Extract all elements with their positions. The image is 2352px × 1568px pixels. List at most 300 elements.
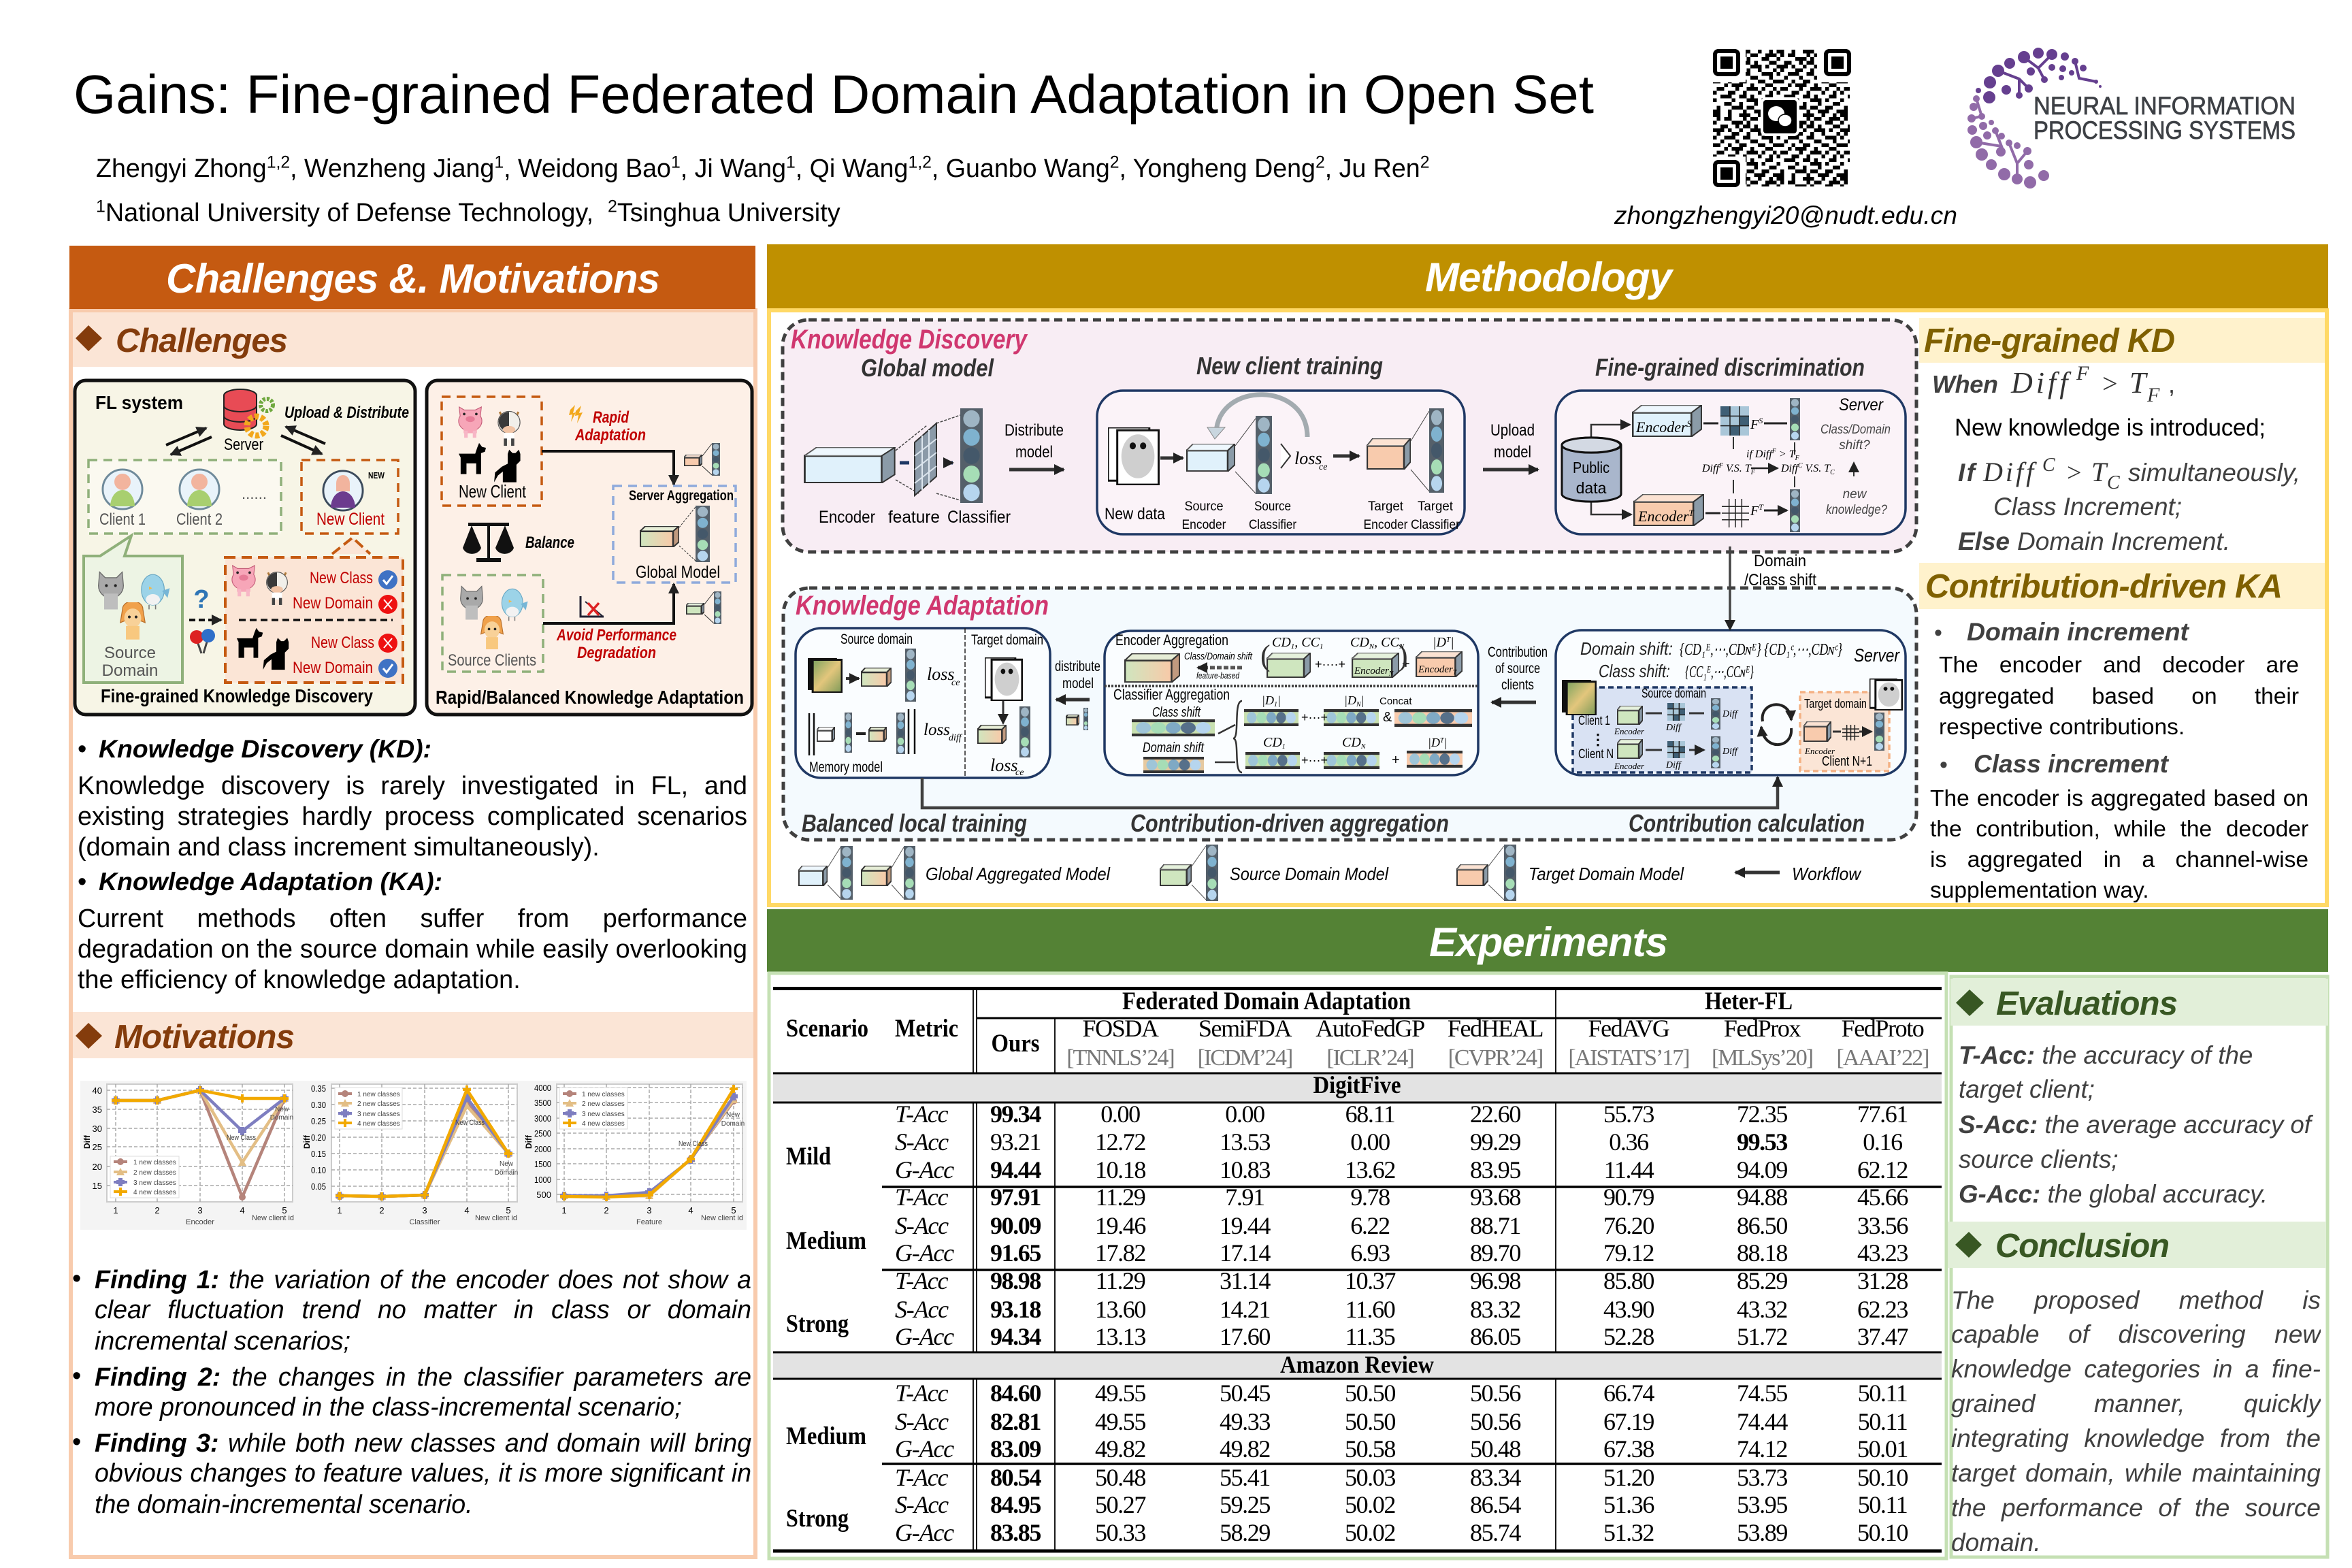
table values: 51.36 bbox=[1603, 1491, 1654, 1518]
panel: contribution-driven KA: The encoder is aggregated based on bbox=[1930, 786, 2308, 811]
table values bbox=[990, 1100, 1908, 1546]
clients group: ...... bbox=[242, 485, 267, 502]
panel: contribution-driven KA: the contribution, while the decoder bbox=[1930, 817, 2308, 842]
text: findings: clear fluctuation trend no matter in class or domain bbox=[95, 1295, 751, 1324]
arrow: distribute model bbox=[1004, 421, 1064, 470]
text: knowledge discovery bbox=[78, 734, 747, 863]
text: conclusion: target domain, while maintaining bbox=[1951, 1459, 2321, 1487]
source domain clients: Diff bbox=[1722, 709, 1739, 719]
metric labels: G-Acc bbox=[895, 1435, 954, 1463]
table values: 52.28 bbox=[1603, 1323, 1654, 1350]
panel: fine-grained KD: simultaneously, bbox=[2128, 459, 2300, 487]
contribution-driven aggregation box: , CC bbox=[1374, 635, 1399, 650]
panel: fine-grained KD: , bbox=[2168, 370, 2175, 398]
contribution-driven aggregation box: | bbox=[1444, 736, 1447, 749]
table values: 12.72 bbox=[1095, 1128, 1145, 1156]
table header: [AISTATS’17] bbox=[1568, 1045, 1689, 1071]
chart: encoder: New Class bbox=[227, 1134, 256, 1142]
table values: 50.02 bbox=[1345, 1519, 1395, 1546]
contribution-driven aggregation box: + bbox=[1392, 753, 1400, 768]
table values: 10.18 bbox=[1095, 1156, 1145, 1183]
table values: 49.82 bbox=[1095, 1435, 1145, 1463]
diagram: knowledge adaptation bbox=[783, 588, 1916, 840]
panel: contribution-driven KA: • bbox=[1934, 620, 1942, 646]
source domain clients: Encoder bbox=[1614, 726, 1645, 736]
arrow: distribute model bbox=[1055, 659, 1100, 730]
table values: 13.13 bbox=[1095, 1323, 1145, 1350]
global model: Classifier bbox=[947, 508, 1011, 527]
contribution-driven aggregation box: CD bbox=[1263, 735, 1282, 750]
chart: feature: 4000 bbox=[534, 1083, 551, 1093]
fine-grained discrimination: Encoder bbox=[1638, 508, 1689, 525]
contribution-driven aggregation box: feature-based bbox=[1196, 670, 1240, 681]
fine-grained discrimination: F bbox=[1718, 462, 1724, 470]
text: conclusion: integrating knowledge from the bbox=[1951, 1424, 2321, 1452]
global model: feature bbox=[888, 508, 940, 527]
fine-grained discrimination: if Diff bbox=[1746, 448, 1772, 460]
figure: rapid and balanced knowledge adaptation: Degradation bbox=[577, 644, 656, 662]
panel: fine-grained KD: Diff bbox=[1982, 457, 2037, 487]
new client box bbox=[442, 397, 542, 506]
table values: 55.73 bbox=[1603, 1100, 1654, 1128]
fine-grained discrimination: Encoder bbox=[1636, 419, 1687, 436]
table header: Heter-FL bbox=[1705, 987, 1793, 1015]
text: conclusion: the performance of the source bbox=[1951, 1494, 2321, 1522]
table values: 91.65 bbox=[990, 1239, 1041, 1267]
table values: 13.60 bbox=[1095, 1296, 1145, 1323]
chart: encoder: 25 bbox=[93, 1142, 102, 1152]
icon: server bbox=[224, 389, 273, 436]
title: Gains: Fine-grained Federated Domain Adaptation in Open Set bbox=[74, 64, 1594, 125]
text: knowledge discovery: • bbox=[78, 735, 86, 764]
new client training: Classifier bbox=[1411, 518, 1460, 532]
new client training: Source bbox=[1184, 500, 1224, 514]
figure: rapid and balanced knowledge adaptation: Rapid/Balanced Knowledge Adaptation bbox=[436, 687, 744, 708]
source domain clients: ⋮ bbox=[1590, 731, 1605, 748]
panel: contribution-driven KA: Class increment bbox=[1974, 750, 2170, 778]
new client training: Target bbox=[1418, 500, 1454, 514]
contribution-driven aggregation box: , CC bbox=[1294, 635, 1320, 650]
panel: contribution-driven KA: • bbox=[1940, 752, 1948, 778]
target client: Client N+1 bbox=[1822, 754, 1872, 769]
table values: 74.12 bbox=[1737, 1435, 1787, 1463]
icon: question and lollipops bbox=[189, 585, 221, 653]
chart: feature: Diff bbox=[524, 1134, 534, 1149]
table values: 68.11 bbox=[1345, 1100, 1394, 1128]
chart: encoder: 4 new classes bbox=[133, 1189, 176, 1196]
contribution-driven aggregation box: T bbox=[1440, 737, 1445, 745]
table values: 49.55 bbox=[1095, 1408, 1145, 1435]
fine-grained discrimination bbox=[1556, 353, 1906, 534]
chart: encoder: New bbox=[275, 1106, 289, 1113]
contribution-driven aggregation box: +···+ bbox=[1301, 710, 1328, 724]
chart: feature: Feature bbox=[636, 1218, 662, 1226]
table values: 13.62 bbox=[1345, 1156, 1395, 1183]
chart: feature bbox=[524, 1083, 745, 1226]
contribution-driven aggregation box: N bbox=[1360, 743, 1367, 751]
table values: 99.53 bbox=[1737, 1128, 1787, 1156]
contribution-driven aggregation box: CD bbox=[1272, 635, 1291, 650]
global model bbox=[804, 354, 1011, 527]
subheading: challenges bbox=[73, 312, 753, 367]
table values: 17.14 bbox=[1220, 1239, 1271, 1267]
table values: 10.83 bbox=[1220, 1156, 1270, 1183]
metric labels: S-Acc bbox=[895, 1408, 949, 1435]
chart: classifier: 0.10 bbox=[311, 1165, 326, 1175]
table values: 37.47 bbox=[1857, 1323, 1908, 1350]
server aggregation box: Server Aggregation bbox=[629, 488, 734, 504]
contribution-driven aggregation box: N bbox=[1388, 670, 1394, 678]
chart: classifier: 5 bbox=[506, 1205, 511, 1215]
chart: classifier: 2 bbox=[379, 1205, 385, 1215]
panel: contribution-driven KA: The encoder and decoder are bbox=[1939, 653, 2299, 678]
chart: feature: 2 bbox=[604, 1205, 609, 1215]
chart: classifier: 4 new classes bbox=[357, 1120, 400, 1128]
new client training: Encoder bbox=[1181, 518, 1226, 532]
contribution-driven aggregation box: & bbox=[1383, 710, 1392, 725]
table values: 50.02 bbox=[1345, 1491, 1395, 1518]
callout: source domain bbox=[84, 536, 182, 683]
subheading: evaluations bbox=[1950, 979, 2328, 1026]
fine-grained discrimination: S bbox=[1687, 419, 1692, 429]
contribution-driven aggregation box: +···+ bbox=[1301, 753, 1328, 767]
chart: feature: 2000 bbox=[534, 1144, 551, 1154]
table values: 49.33 bbox=[1220, 1408, 1270, 1435]
arrow: workflow from local training bbox=[922, 777, 1778, 808]
band: Amazon Review: Amazon Review bbox=[1280, 1351, 1434, 1378]
table values: 76.20 bbox=[1603, 1212, 1654, 1239]
fine-grained discrimination: Diff bbox=[1781, 463, 1798, 474]
legend: Workflow bbox=[1792, 864, 1862, 884]
table values: 59.25 bbox=[1220, 1491, 1270, 1518]
contribution-driven aggregation box: Domain shift bbox=[1143, 740, 1205, 755]
table header: [ICDM’24] bbox=[1198, 1045, 1292, 1071]
band: DigitFive bbox=[773, 1071, 1942, 1102]
balanced local training box: diff bbox=[949, 733, 963, 743]
metric labels: S-Acc bbox=[895, 1296, 949, 1323]
table values: 66.74 bbox=[1603, 1379, 1654, 1407]
chart: encoder: 3 new classes bbox=[133, 1179, 176, 1187]
fine-grained discrimination: Fine-grained discrimination bbox=[1595, 353, 1865, 381]
table header: [MLSys’20] bbox=[1712, 1045, 1812, 1071]
panel: contribution-driven KA: supplementation way. bbox=[1930, 878, 2149, 903]
chart: feature: New bbox=[726, 1111, 740, 1119]
chart: encoder: 1 bbox=[113, 1205, 118, 1215]
table values: 93.68 bbox=[1470, 1183, 1520, 1211]
text: evaluation metrics: G-Acc: the global accuracy. bbox=[1959, 1180, 2268, 1208]
text: findings: Finding 1: the variation of the encoder does not show a bbox=[95, 1265, 751, 1294]
text: knowledge discovery: existing strategies hardly process complicated scenarios bbox=[78, 802, 747, 831]
figure: rapid and balanced knowledge adaptation: Balance bbox=[525, 534, 574, 552]
metric labels: G-Acc bbox=[895, 1519, 954, 1546]
fine-grained discrimination: V.S. T bbox=[1803, 463, 1831, 474]
logo: NeurIPS: NEURAL INFORMATION bbox=[2034, 92, 2296, 120]
table values: 80.54 bbox=[990, 1464, 1041, 1491]
table values: 0.16 bbox=[1863, 1128, 1902, 1156]
authors: Zhengyi Zhong1,2, Wenzheng Jiang1, Weidong Bao1, Ji Wang1, Qi Wang1,2, Guanbo Wang2, Yongheng Deng2, Ju Ren2 bbox=[96, 153, 1429, 182]
source clients box bbox=[442, 575, 543, 672]
target client: Encoder bbox=[1804, 746, 1835, 756]
panel: fine-grained KD: When bbox=[1932, 370, 1998, 398]
text: evaluation metrics: T-Acc: the accuracy of the bbox=[1959, 1041, 2253, 1069]
text: knowledge adaptation: the efficiency of knowledge adaptation. bbox=[78, 966, 521, 994]
table header: Scenario bbox=[786, 1015, 868, 1043]
panel: fine-grained KD: F bbox=[2146, 384, 2160, 406]
table values: 55.41 bbox=[1220, 1464, 1270, 1491]
table values: 97.91 bbox=[990, 1183, 1041, 1211]
chart: classifier: 4 bbox=[464, 1205, 470, 1215]
arrow: distribute model: distribute bbox=[1055, 659, 1100, 674]
chart: feature: 1500 bbox=[534, 1159, 551, 1169]
table values: 67.38 bbox=[1603, 1435, 1654, 1463]
figure: fine-grained knowledge discovery: FL system bbox=[95, 392, 183, 413]
affiliations: 1National University of Defense Technology, 2Tsinghua University bbox=[96, 197, 840, 227]
chart: classifier: 0.20 bbox=[311, 1132, 326, 1143]
table values: 86.50 bbox=[1737, 1212, 1787, 1239]
table values: 99.34 bbox=[990, 1100, 1041, 1128]
balanced local training box bbox=[796, 628, 1050, 778]
fine-grained discrimination: new bbox=[1843, 487, 1867, 502]
source domain clients: Diff bbox=[1722, 747, 1739, 757]
table values: 86.54 bbox=[1470, 1491, 1521, 1518]
new client bbox=[301, 460, 398, 534]
table header: [CVPR’24] bbox=[1448, 1045, 1542, 1071]
fine-grained discrimination: knowledge? bbox=[1826, 503, 1887, 517]
text: knowledge adaptation: • bbox=[78, 868, 86, 896]
table values: 83.34 bbox=[1470, 1464, 1521, 1491]
table values: 50.01 bbox=[1857, 1435, 1908, 1463]
table values: 50.58 bbox=[1345, 1435, 1395, 1463]
contribution-driven aggregation box: Class shift bbox=[1152, 705, 1201, 720]
figure: rapid and balanced knowledge adaptation: Adaptation bbox=[574, 426, 646, 444]
chart: classifier: Domain bbox=[495, 1169, 518, 1177]
new client training bbox=[1097, 352, 1465, 534]
contribution-driven aggregation box: + bbox=[1402, 657, 1410, 672]
fine-grained discrimination: > T bbox=[1776, 448, 1796, 460]
arrow: upload model bbox=[1483, 421, 1538, 470]
diagram: knowledge adaptation: Knowledge Adaptation bbox=[796, 591, 1049, 621]
diagram: knowledge adaptation: Balanced local training bbox=[802, 809, 1027, 837]
text: findings: Finding 3: while both new classes and domain will bring bbox=[95, 1428, 751, 1457]
chart: classifier: New client id bbox=[475, 1214, 517, 1222]
global model: Encoder bbox=[819, 508, 875, 527]
table values: 13.53 bbox=[1220, 1128, 1270, 1156]
panel: contribution-driven KA: Contribution-driven KA bbox=[1925, 568, 2283, 605]
heading: experiments bbox=[767, 909, 2328, 972]
table values: 98.98 bbox=[990, 1267, 1041, 1294]
table values: 0.00 bbox=[1100, 1100, 1140, 1128]
text: conclusion: knowledge categories in a fine- bbox=[1951, 1355, 2321, 1383]
chart: feature: 500 bbox=[536, 1190, 551, 1200]
connector: domain / class shift: Domain bbox=[1754, 552, 1806, 570]
table values: 50.10 bbox=[1857, 1464, 1908, 1491]
contribution-driven aggregation box: 1 bbox=[1291, 642, 1294, 651]
panel: fine-grained KD: T bbox=[2091, 457, 2108, 487]
chart: feature: 3500 bbox=[534, 1098, 551, 1108]
figure: fine-grained knowledge discovery: Fine-grained Knowledge Discovery bbox=[101, 685, 373, 706]
global model: Global model bbox=[861, 354, 994, 382]
chart: feature: New client id bbox=[701, 1214, 743, 1222]
table values: 10.37 bbox=[1345, 1267, 1395, 1294]
chart: encoder: 2 bbox=[154, 1205, 160, 1215]
table header: FedProx bbox=[1724, 1015, 1801, 1042]
panel: fine-grained KD bbox=[1919, 318, 2325, 555]
fine-grained discrimination: F bbox=[1750, 469, 1756, 476]
source domain clients: Diff bbox=[1665, 723, 1682, 733]
table values: 51.72 bbox=[1737, 1323, 1787, 1350]
table values: 50.11 bbox=[1858, 1379, 1907, 1407]
text: findings bbox=[72, 1264, 751, 1520]
figure: rapid and balanced knowledge adaptation bbox=[427, 380, 752, 715]
panel: fine-grained KD: T bbox=[2129, 366, 2149, 399]
figure: fine-grained knowledge discovery: Upload & Distribute bbox=[284, 404, 409, 422]
balanced local training box: ce bbox=[1015, 768, 1024, 778]
chart: classifier: 3 bbox=[422, 1205, 427, 1215]
chart: encoder: 20 bbox=[93, 1162, 102, 1172]
text: findings: incremental scenarios; bbox=[95, 1326, 350, 1355]
table header: FOSDA bbox=[1082, 1015, 1159, 1042]
table values: 83.95 bbox=[1470, 1156, 1520, 1183]
figure: rapid and balanced knowledge adaptation: Avoid Performance bbox=[556, 626, 676, 644]
heading: experiments: Experiments bbox=[1429, 919, 1668, 965]
table values: 14.21 bbox=[1220, 1296, 1270, 1323]
target client: Target domain bbox=[1804, 697, 1867, 710]
chart: encoder: 3 bbox=[197, 1205, 203, 1215]
chart: feature: 4 new classes bbox=[582, 1120, 625, 1128]
target client bbox=[1800, 679, 1902, 771]
scenario labels: Strong bbox=[786, 1310, 849, 1338]
panel: fine-grained KD: Domain Increment. bbox=[2017, 527, 2230, 555]
chart: feature: New Class bbox=[679, 1140, 708, 1148]
contribution calculation box: Class shift: bbox=[1599, 661, 1670, 681]
chart: feature: 2500 bbox=[534, 1128, 551, 1139]
text: evaluation metrics: S-Acc: the average accuracy of bbox=[1959, 1111, 2314, 1139]
balanced local training box: Target domain bbox=[971, 632, 1043, 648]
contribution calculation box: Domain shift: bbox=[1580, 638, 1673, 659]
table values: 89.70 bbox=[1470, 1239, 1520, 1267]
subheading: evaluations: Evaluations bbox=[1996, 985, 2178, 1022]
panel: challenges and motivations bbox=[69, 246, 755, 1557]
contribution calculation box bbox=[1556, 630, 1906, 775]
chart: feature: Domain bbox=[721, 1120, 745, 1128]
contribution-driven aggregation box: | bbox=[1277, 693, 1281, 707]
panel: fine-grained KD: C bbox=[2042, 455, 2055, 476]
new client training: Target bbox=[1368, 500, 1404, 514]
fine-grained discrimination: Diff bbox=[1702, 463, 1719, 474]
icon: question and lollipops: ? bbox=[193, 585, 210, 614]
table header: FedHEAL bbox=[1448, 1015, 1543, 1042]
clients group: Client 1 bbox=[99, 510, 146, 529]
arrow: upload model: Upload bbox=[1490, 421, 1535, 440]
table values: 50.56 bbox=[1470, 1408, 1520, 1435]
arrow: distribute model: model bbox=[1062, 676, 1094, 691]
arrow: distribute model: Distribute bbox=[1004, 421, 1064, 440]
source domain clients: Client N bbox=[1578, 747, 1614, 762]
panel: fine-grained KD: New knowledge is introduced; bbox=[1955, 414, 2266, 441]
table values: 17.60 bbox=[1220, 1323, 1270, 1350]
text: findings: • bbox=[72, 1264, 81, 1293]
arrow: distribute model: model bbox=[1015, 443, 1053, 461]
table values: 0.00 bbox=[1225, 1100, 1264, 1128]
table values: 50.33 bbox=[1095, 1519, 1145, 1546]
text: knowledge adaptation: Current methods often suffer from performance bbox=[78, 904, 747, 933]
chart: feature: 5 bbox=[731, 1205, 736, 1215]
heading: methodology bbox=[767, 244, 2328, 308]
text: knowledge discovery: Knowledge Discovery (KD): bbox=[99, 734, 431, 763]
table header: [ICLR’24] bbox=[1326, 1045, 1414, 1071]
contribution-driven aggregation box: | bbox=[1450, 635, 1454, 650]
table values: 83.32 bbox=[1470, 1296, 1520, 1323]
table values: 45.66 bbox=[1857, 1183, 1908, 1211]
table values: 77.61 bbox=[1857, 1100, 1908, 1128]
chart: classifier: 3 new classes bbox=[357, 1111, 400, 1118]
table values: 53.73 bbox=[1737, 1464, 1787, 1491]
metric labels: T-Acc bbox=[895, 1464, 949, 1491]
contribution-driven aggregation box: N bbox=[1356, 701, 1362, 708]
chart: encoder: Domain bbox=[270, 1114, 293, 1122]
contribution-driven aggregation box: CD bbox=[1342, 735, 1361, 750]
clients group bbox=[88, 460, 281, 534]
text: findings: the domain-incremental scenario. bbox=[95, 1490, 473, 1518]
source domain clients bbox=[1562, 680, 1752, 772]
table header: FedAVG bbox=[1588, 1015, 1669, 1042]
contribution-driven aggregation box: 1 bbox=[1274, 701, 1277, 708]
table values: 31.28 bbox=[1857, 1267, 1908, 1294]
fine-grained discrimination: Class/Domain bbox=[1820, 423, 1891, 437]
table values: 88.71 bbox=[1470, 1212, 1520, 1239]
table values: 74.44 bbox=[1737, 1408, 1788, 1435]
scenario labels: Mild bbox=[786, 1143, 831, 1171]
chart: encoder: 30 bbox=[93, 1124, 102, 1134]
table values: 67.19 bbox=[1603, 1408, 1654, 1435]
chart: encoder: 40 bbox=[93, 1085, 102, 1096]
table values: 83.09 bbox=[990, 1435, 1041, 1463]
metric labels: G-Acc bbox=[895, 1156, 954, 1183]
chart: encoder: New client id bbox=[252, 1214, 294, 1222]
band: Amazon Review bbox=[773, 1351, 1942, 1379]
panel: contribution-driven KA: aggregated based on their bbox=[1939, 684, 2299, 709]
table values: 93.18 bbox=[990, 1296, 1041, 1323]
table values: 50.11 bbox=[1858, 1491, 1907, 1518]
table values: 53.89 bbox=[1737, 1519, 1787, 1546]
contribution-driven aggregation box: |D bbox=[1344, 693, 1356, 707]
icon: cycle arrows bbox=[1761, 704, 1791, 745]
scenario labels: Medium bbox=[786, 1422, 866, 1450]
chart: feature: 1000 bbox=[534, 1175, 551, 1185]
new client training: loss bbox=[1294, 448, 1322, 468]
band: DigitFive: DigitFive bbox=[1313, 1071, 1401, 1098]
table values: 50.56 bbox=[1470, 1379, 1520, 1407]
text: knowledge adaptation bbox=[78, 867, 747, 996]
table values: 85.29 bbox=[1737, 1267, 1787, 1294]
metric labels: T-Acc bbox=[895, 1100, 949, 1128]
panel: fine-grained KD: Else bbox=[1958, 527, 2010, 555]
fine-grained discrimination: C bbox=[1798, 462, 1803, 470]
panel: results table bbox=[769, 973, 1946, 1558]
chart: encoder: Diff bbox=[82, 1134, 92, 1149]
contribution-driven aggregation box: Encoder bbox=[1418, 664, 1453, 675]
fine-grained discrimination: Public bbox=[1573, 459, 1610, 476]
panel: contribution-driven KA bbox=[1919, 563, 2325, 904]
table values: 84.60 bbox=[990, 1379, 1041, 1407]
table values: 11.29 bbox=[1096, 1183, 1145, 1211]
chart: classifier: 0.35 bbox=[311, 1083, 326, 1094]
chart: classifier: Classifier bbox=[410, 1218, 440, 1226]
new client: New Client bbox=[316, 510, 385, 529]
figure: fine-grained knowledge discovery: Server bbox=[224, 436, 263, 454]
callout: source domain: Domain bbox=[102, 662, 158, 680]
new client training: Classifier bbox=[1249, 518, 1297, 532]
